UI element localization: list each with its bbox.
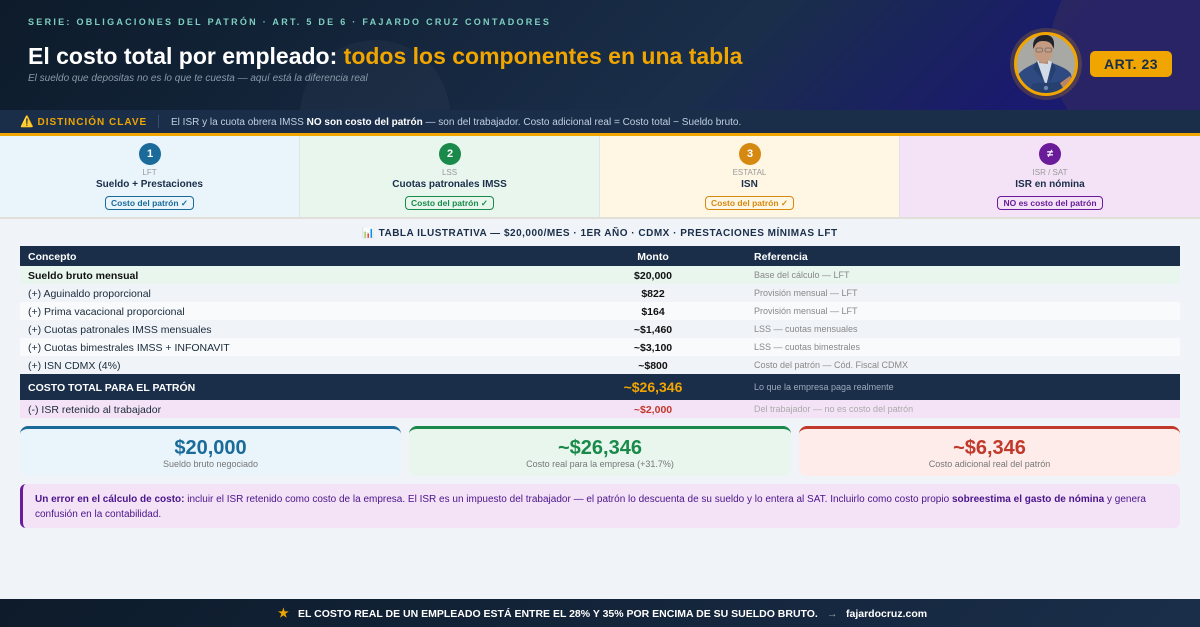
- number 3: [739, 143, 761, 165]
- card name: ISN: [741, 179, 758, 190]
- number 3: 3: [747, 148, 753, 160]
- row: cuotas patronales: (+) Cuotas patronales IMSS mensuales: [28, 324, 212, 336]
- row: ISN: ~$800: [638, 360, 668, 372]
- table title: 📊 TABLA ILUSTRATIVA — $20,000/MES · 1ER AÑO · CDMX · PRESTACIONES MÍNIMAS LFT: [362, 228, 838, 239]
- table header: [20, 246, 1180, 266]
- row: cuotas patronales: ~$1,460: [634, 324, 672, 336]
- row: cuotas patronales: LSS — cuotas mensuales: [754, 324, 858, 334]
- row: total cost: COSTO TOTAL PARA EL PATRÓN: [28, 382, 195, 394]
- row: sueldo bruto: Sueldo bruto mensual: [28, 270, 138, 282]
- card: ISR en nomina: [900, 136, 1200, 219]
- table header: Monto: [637, 251, 669, 263]
- row: prima vacacional: $164: [641, 306, 665, 318]
- row: prima vacacional: [20, 302, 1180, 320]
- law estatal: ESTATAL: [733, 168, 766, 177]
- subtitle: El sueldo que depositas no es lo que te cuesta — aquí está la diferencia real: [28, 73, 368, 84]
- row: cuotas bimestrales: (+) Cuotas bimestrales IMSS + INFONAVIT: [28, 342, 230, 354]
- status pill: Costo del patrón ✓: [711, 198, 788, 208]
- summary: costo real: [409, 426, 791, 476]
- status pill: Costo del patrón ✓: [411, 198, 488, 208]
- status pill: NO es costo del patrón: [1003, 198, 1097, 208]
- number 1: [139, 143, 161, 165]
- row: prima vacacional: (+) Prima vacacional proporcional: [28, 306, 185, 318]
- row: prima vacacional: Provisión mensual — LFT: [754, 306, 858, 316]
- row: cuotas bimestrales: LSS — cuotas bimestrales: [754, 342, 860, 352]
- row: ISR retenido: [20, 400, 1180, 418]
- card name: ISR en nómina: [1015, 179, 1085, 190]
- not-equal symbol: [1039, 143, 1061, 165]
- footer bar: EL COSTO REAL DE UN EMPLEADO ESTÁ ENTRE EL 28% Y 35% POR ENCIMA DE SU SUELDO BRUTO.: [298, 608, 818, 620]
- row: ISN: [20, 356, 1180, 374]
- caption: Costo adicional real del patrón: [929, 459, 1050, 469]
- row: sueldo bruto: [20, 266, 1180, 284]
- card: sueldo + prestaciones: [0, 136, 300, 219]
- row: aguinaldo: Provisión mensual — LFT: [754, 288, 858, 298]
- summary: costo adicional: [799, 426, 1180, 476]
- row: ISR retenido: (-) ISR retenido al trabajador: [28, 404, 161, 416]
- footer bar: [0, 599, 1200, 627]
- law LFT: LFT: [142, 168, 157, 177]
- title: El costo total por empleado: todos los componentes en una tabla: [28, 43, 742, 69]
- row: cuotas bimestrales: ~$3,100: [634, 342, 672, 354]
- law LSS: LSS: [442, 168, 457, 177]
- status pill: [105, 196, 194, 210]
- card name: Cuotas patronales IMSS: [392, 179, 507, 190]
- number 1: 1: [147, 148, 153, 160]
- footer bar: →: [827, 608, 838, 620]
- row: aguinaldo: [20, 284, 1180, 302]
- value: $20,000: [174, 437, 247, 459]
- footer bar: fajardocruz.com: [846, 608, 927, 620]
- warning label: ⚠️ DISTINCIÓN CLAVE: [20, 116, 147, 128]
- number 2: [439, 143, 461, 165]
- status pill: [997, 196, 1103, 210]
- row: total cost: Lo que la empresa paga realmente: [754, 382, 894, 392]
- status pill: Costo del patrón ✓: [111, 198, 188, 208]
- row: ISR retenido: ~$2,000: [634, 404, 672, 416]
- card: ISN: [600, 136, 900, 219]
- card: cuotas patronales: [300, 136, 600, 219]
- portrait avatar: [1010, 28, 1082, 100]
- number 2: 2: [447, 148, 453, 160]
- footer bar: ★: [278, 606, 289, 620]
- law ISR / SAT: ISR / SAT: [1033, 168, 1067, 177]
- table header: Concepto: [28, 251, 76, 263]
- row: ISN: (+) ISN CDMX (4%): [28, 360, 120, 372]
- cost table: [20, 246, 1180, 418]
- row: total cost: [20, 374, 1180, 400]
- status pill: [405, 196, 494, 210]
- row: sueldo bruto: Base del cálculo — LFT: [754, 270, 850, 280]
- table header: Referencia: [754, 251, 808, 263]
- row: aguinaldo: (+) Aguinaldo proporcional: [28, 288, 151, 300]
- caption: Sueldo bruto negociado: [163, 459, 258, 469]
- row: cuotas bimestrales: [20, 338, 1180, 356]
- article badge: [1090, 51, 1172, 77]
- value: ~$6,346: [953, 437, 1026, 459]
- article badge: ART. 23: [1104, 56, 1158, 72]
- caption: Costo real para la empresa (+31.7%): [526, 459, 674, 469]
- row: aguinaldo: $822: [641, 288, 665, 300]
- value: ~$26,346: [558, 437, 642, 459]
- header banner: [0, 0, 1200, 110]
- summary: sueldo bruto: [20, 426, 401, 476]
- row: ISR retenido: Del trabajador — no es costo del patrón: [754, 404, 913, 414]
- status pill: [705, 196, 794, 210]
- row: cuotas patronales: [20, 320, 1180, 338]
- row: sueldo bruto: $20,000: [634, 270, 672, 282]
- warning note: [20, 484, 1180, 528]
- row: ISN: Costo del patrón — Cód. Fiscal CDMX: [754, 360, 908, 370]
- series eyebrow: SERIE: OBLIGACIONES DEL PATRÓN · ART. 5 DE 6 · FAJARDO CRUZ CONTADORES: [28, 17, 551, 27]
- card name: Sueldo + Prestaciones: [96, 179, 203, 190]
- distinction text: El ISR y la cuota obrera IMSS NO son costo del patrón — son del trabajador. Costo adicional real = Costo total − Sueldo bruto.: [171, 117, 741, 128]
- warning note: Un error en el cálculo de costo: incluir el ISR retenido como costo de la empresa. El ISR es un impuesto del trabajador — el patrón lo descuenta de su sueldo y lo entera al SAT. Incluirlo como costo propio sobreestima el gasto de nómina y genera confusión en la contabilidad.: [35, 494, 1146, 520]
- key distinction bar: [0, 110, 1200, 136]
- row: total cost: ~$26,346: [624, 379, 682, 395]
- not-equal symbol: ≠: [1047, 148, 1053, 160]
